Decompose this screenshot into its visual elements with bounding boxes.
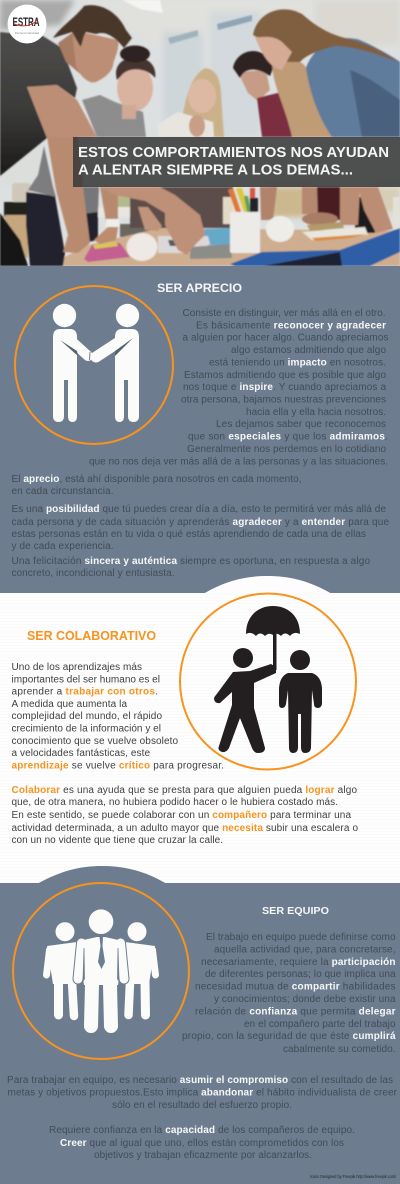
text block: consiste en distinguir: Consiste en distinguir, ver más allá en el otro. (182, 308, 386, 319)
girl head and hair (117, 65, 153, 111)
logo badge: ESTRA (12, 15, 40, 29)
text block: consiste en distinguir: que son especiales y que los admiramos. (188, 432, 388, 443)
text block: uno de los aprendizajes: crecimiento de la información y el (12, 724, 161, 734)
logo badge: Personal identidad (15, 31, 40, 35)
cups and books (266, 216, 294, 242)
text block: una felicitacion: concreto, incondicional y entusiasta. (12, 568, 174, 579)
woman jacket (305, 38, 400, 137)
text block: una posibilidad: cada persona y de cada situación y aprenderás agradecer y a entender para que (12, 517, 389, 528)
text block: el trabajo en equipo: propio, con la seguridad de que éste cumplirá (182, 1031, 396, 1042)
text block: para trabajar en equipo (7, 1075, 398, 1111)
panel: ser equipo (0, 866, 400, 1184)
text block: el trabajo en equipo: El trabajo en equipo puede definirse como (206, 932, 396, 943)
text block: una felicitacion: Una felicitación sincera y auténtica siempre es oportuna, en respuesta a algo (12, 556, 370, 567)
text block: consiste en distinguir: Es básicamente reconocer y agradecer (196, 320, 386, 331)
man shirt, head and arms (0, 32, 77, 176)
text block: consiste en distinguir: hacia ella y ella hacia nosotros. (246, 407, 386, 418)
title band (73, 137, 400, 187)
text block: el aprecio: en cada circunstancia. (12, 486, 114, 497)
laptop (130, 187, 233, 228)
text block: consiste en distinguir: está teniendo un impacto en nosotros. (209, 357, 386, 368)
table (47, 228, 400, 266)
text block: consiste en distinguir: a alguien por hacer algo. Cuando apreciamos (182, 333, 388, 344)
text block: el aprecio: El aprecio, está ahí disponible para nosotros en cada momento, (12, 474, 302, 485)
circle tab over gray panel (203, 576, 332, 594)
woman hair (272, 61, 332, 137)
text block: requiere confianza (49, 1125, 355, 1161)
text block: el trabajo en equipo: cabalmente su cometido. (283, 1044, 396, 1055)
text block: para trabajar en equipo: sólo en el resultado del esfuerzo propio. (112, 1100, 292, 1111)
text block: colaborar es una ayuda: actividad determinada, a un adulto mayor que necesita subir una escalera o (12, 823, 358, 834)
right background (355, 197, 375, 233)
heading: ser equipo: SER EQUIPO (262, 905, 329, 917)
blonde woman (177, 68, 224, 137)
text block: una felicitacion (12, 556, 370, 579)
text block: consiste en distinguir: Generalmente nos perdemos en lo cotidiano (187, 444, 386, 455)
heading: ser colaborativo: SER COLABORATIVO (27, 628, 156, 643)
young man (238, 70, 270, 101)
text block: uno de los aprendizajes: aprendizaje se vuelve crítico para progresar. (12, 760, 224, 771)
text block: consiste en distinguir: Les dejamos saber que reconocemos (216, 419, 386, 430)
text block: colaborar es una ayuda: En este sentido, se puede colaborar con un compañero para terminar una (12, 810, 351, 821)
text block: requiere confianza: Requiere confianza en la capacidad de los compañeros de equipo. (49, 1125, 355, 1136)
hero photo: team around a table (0, 0, 400, 267)
heading: ser aprecio: SER APRECIO (157, 281, 242, 295)
text block: una posibilidad: estas personas están en tu vida o qué estás aprendiendo de cada una de ellas (12, 529, 366, 540)
right table objects (198, 228, 230, 245)
text block: el trabajo en equipo: necesidad mutua de compartir habilidades (195, 982, 396, 993)
text block: el trabajo en equipo: en el compañero parte del trabajo (244, 1019, 396, 1030)
text block: requiere confianza: objetivos y trabajan eficazmente por alcanzarlos. (94, 1150, 312, 1161)
text block: una posibilidad (12, 504, 389, 552)
text block: colaborar es una ayuda: que, de otra manera, no hubiera podido hacer o le hubiera costado más. (12, 797, 338, 808)
title band: A ALENTAR SIEMPRE A LOS DEMAS... (78, 162, 353, 178)
text block: consiste en distinguir: otra persona, bajamos nuestras prevenciones (181, 394, 386, 406)
circle tab over white panel (37, 866, 167, 884)
striped top (82, 95, 146, 137)
girl arm and hand (100, 187, 118, 222)
text block: colaborar es una ayuda: Colaborar es una ayuda que se presta para que alguien pueda lograr algo (12, 785, 357, 796)
text block: uno de los aprendizajes: complejidad del mundo, el rápido (12, 711, 162, 722)
text block: consiste en distinguir: que no nos deja ver más allá de a las personas y a las situaciones. (89, 456, 388, 467)
text block: consiste en distinguir (89, 308, 388, 467)
text block: uno de los aprendizajes: conocimiento que se vuelve obsoleto (12, 736, 178, 747)
lower people arms (260, 187, 277, 220)
icon: team of three people (13, 883, 189, 1059)
logo badge (8, 4, 46, 44)
left background objects (12, 183, 31, 202)
text block: uno de los aprendizajes: A medida que aumenta la (12, 699, 127, 710)
text block: uno de los aprendizajes: aprender a trabajar con otros. (12, 687, 158, 698)
icon: handshake (15, 286, 173, 444)
jeans (0, 213, 28, 266)
text block: colaborar es una ayuda (12, 785, 358, 846)
panel: ser aprecio (0, 266, 400, 593)
text block: para trabajar en equipo: Para trabajar en equipo, es necesario asumir el compromiso con el resultado de las (7, 1075, 393, 1086)
text block: consiste en distinguir: nos toque e inspire. Y cuando apreciamos a (183, 382, 386, 393)
window details (217, 15, 252, 30)
text block: consiste en distinguir: Estamos admitiendo que es posible que algo (184, 370, 386, 381)
text block: requiere confianza: Creer que al igual que uno, ellos están comprometidos con los (60, 1138, 344, 1149)
title band: ESTOS COMPORTAMIENTOS NOS AYUDAN (78, 145, 389, 161)
text block: para trabajar en equipo: metas y objetivos propuestos.Esto implica abandonar el hábito individualista de creer (8, 1088, 398, 1099)
text block: una posibilidad: y de cada experiencia. (12, 541, 114, 552)
icon: person holding umbrella (180, 594, 356, 770)
text block: el trabajo en equipo: de diferentes personas; lo que implica una (205, 969, 396, 980)
panel: ser colaborativo (0, 576, 400, 883)
text block: uno de los aprendizajes: importantes del ser humano es el (12, 674, 160, 685)
text block: consiste en distinguir: algo estamos admitiendo que algo (231, 345, 386, 356)
text block: el trabajo en equipo: relación de confianza que permita delegar (195, 1006, 396, 1017)
text block: el trabajo en equipo: y conocimientos; donde debe existir una (214, 994, 396, 1005)
pencil cup (223, 197, 233, 224)
text block: uno de los aprendizajes (12, 662, 224, 771)
text block: colaborar es una ayuda: con un no vidente que tiene que cruzar la calle. (12, 835, 223, 846)
text block: el trabajo en equipo: aquella actividad que, para concretarse, (214, 944, 396, 955)
binder (230, 228, 400, 266)
text block: una posibilidad: Es una posibilidad que tú puedes crear día a día, esto te permitirá ver más allá de (12, 504, 386, 515)
text block: uno de los aprendizajes: Uno de los aprendizajes más (12, 662, 142, 673)
text block: el trabajo en equipo: necesariamente, requiere la participación (201, 957, 396, 968)
text block: el aprecio (12, 474, 302, 497)
text block: el trabajo en equipo (182, 932, 396, 1055)
text block: uno de los aprendizajes: a velocidades fantásticas, este (12, 748, 150, 759)
